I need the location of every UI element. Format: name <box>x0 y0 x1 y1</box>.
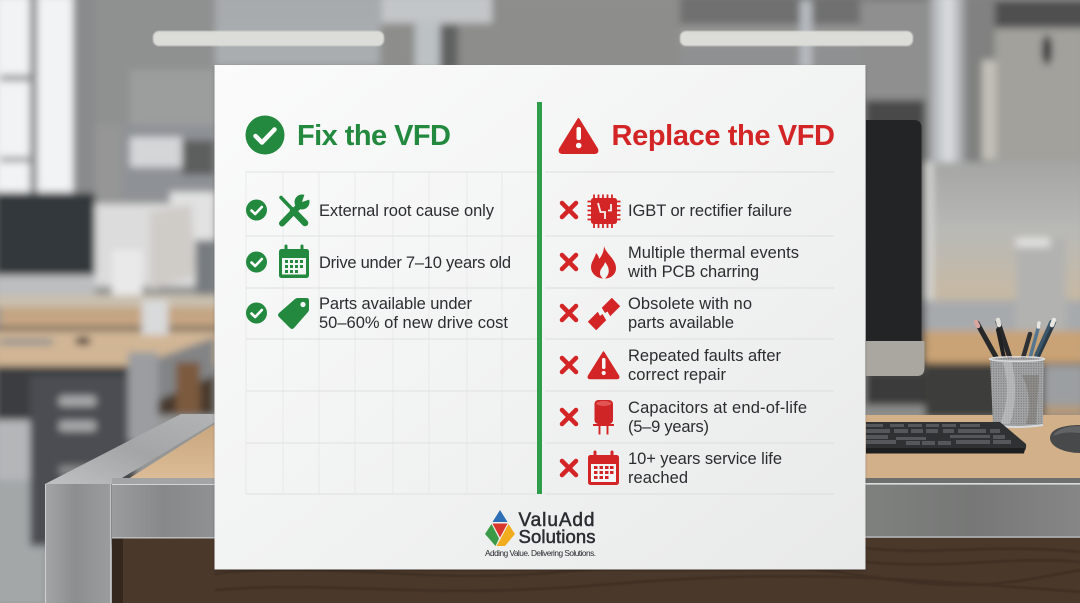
center divider bar <box>537 102 542 494</box>
icon: calendar <box>279 246 309 278</box>
keyboard <box>866 422 1026 454</box>
row: repeated faults: correct repair <box>628 366 726 384</box>
logo mark <box>485 510 515 546</box>
icon: broken component <box>588 298 620 330</box>
row: thermal events: Multiple thermal events <box>628 244 799 262</box>
background grid: left column <box>246 172 537 494</box>
row: external root cause <box>246 193 495 224</box>
logo: ValuAdd Solutions <box>485 510 596 558</box>
row: capacitors: Capacitors at end-of-life <box>628 399 807 417</box>
row: external root cause: External root cause only <box>319 202 495 220</box>
row: thermal events: with PCB charring <box>627 263 759 281</box>
row: repeated faults: Repeated faults after <box>628 347 782 365</box>
row lines: right column <box>545 172 834 494</box>
row: IGBT failure: IGBT or rectifier failure <box>628 202 792 220</box>
icon: warning <box>588 352 619 378</box>
row: obsolete: parts available <box>628 314 734 332</box>
icon: flame <box>591 246 616 278</box>
right monitor <box>866 120 924 376</box>
logo: ValuAdd Solutions: ValuAdd <box>518 510 594 531</box>
row: IGBT failure <box>562 194 792 228</box>
replace list <box>562 194 807 487</box>
row: capacitors <box>562 399 807 436</box>
panel: decision card <box>214 65 866 570</box>
row: parts cost: Parts available under <box>319 295 472 313</box>
foreground desk <box>45 414 1080 603</box>
row: capacitors: (5–9 years) <box>628 418 709 436</box>
logo: ValuAdd Solutions: Adding Value. Delivering Solutions. <box>485 548 596 558</box>
icon: chip <box>588 194 620 228</box>
row: service life: reached <box>628 469 688 487</box>
row: parts cost <box>246 295 508 332</box>
row: service life <box>562 450 782 487</box>
row: thermal events <box>562 244 799 281</box>
heading: Fix the VFD: Fix the VFD <box>297 120 451 152</box>
icon: calendar <box>588 452 619 485</box>
pencil cup <box>976 320 1054 427</box>
row: drive age: Drive under 7–10 years old <box>319 254 511 272</box>
row: parts cost: 50–60% of new drive cost <box>319 314 508 332</box>
row: service life: 10+ years service life <box>628 450 782 468</box>
row: obsolete <box>562 295 752 332</box>
icon: price tag <box>278 298 309 329</box>
icon: capacitor <box>593 400 614 434</box>
icon: large green check <box>246 116 284 154</box>
icon: tools <box>281 193 311 224</box>
icon: large red warning <box>560 119 597 153</box>
mouse <box>1050 425 1080 453</box>
logo: ValuAdd Solutions: Solutions <box>518 526 596 547</box>
ceiling lights <box>153 31 913 46</box>
row: obsolete: Obsolete with no <box>628 295 752 313</box>
fix list <box>246 193 511 332</box>
row: repeated faults <box>562 347 782 384</box>
heading: Replace the VFD: Replace the VFD <box>612 120 835 152</box>
row: drive age <box>246 246 511 278</box>
